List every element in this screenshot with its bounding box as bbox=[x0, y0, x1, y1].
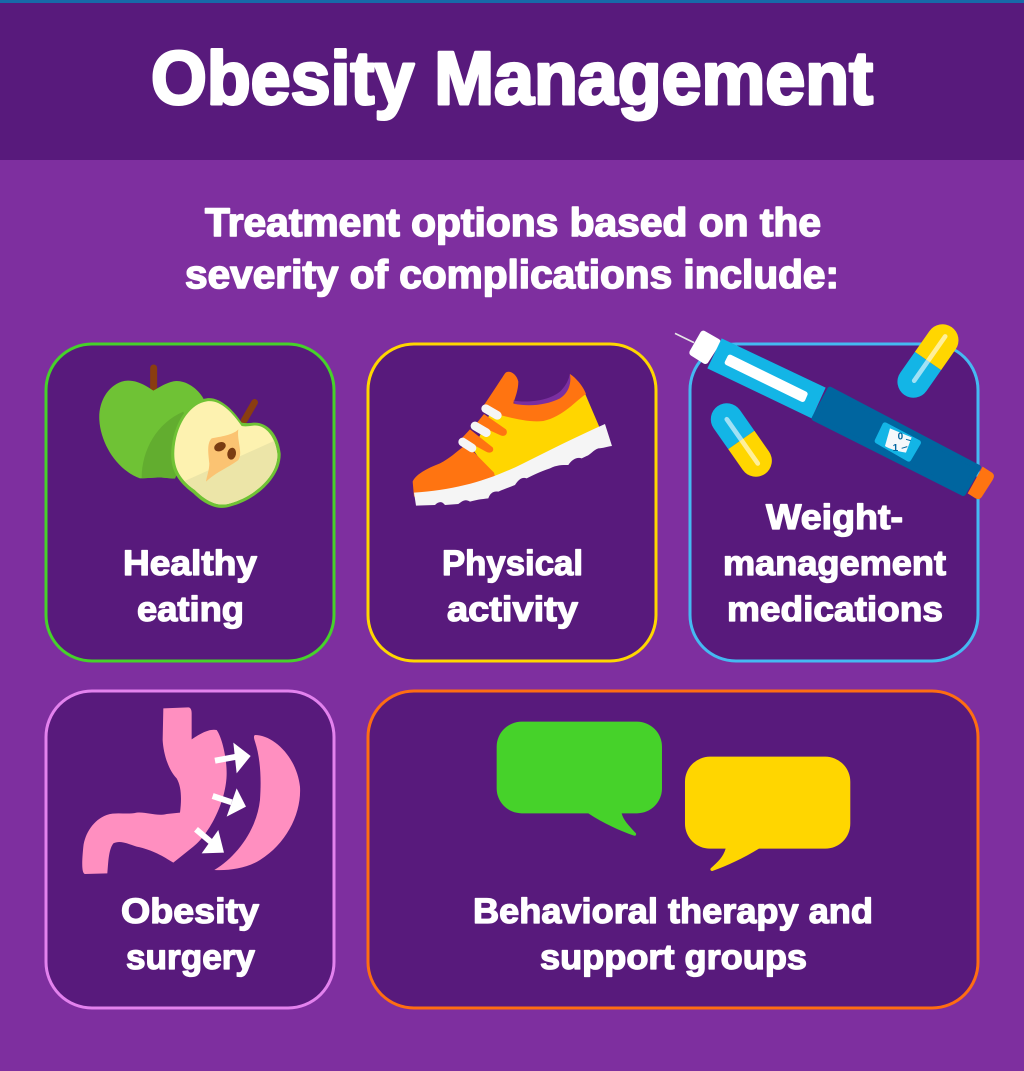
label: behavioral therapy and support groups: Behavioral therapy and bbox=[473, 892, 873, 931]
label: weight-management medications: medications bbox=[727, 590, 943, 629]
yellow bubble bbox=[685, 757, 850, 871]
label: weight-management medications: Weight- bbox=[766, 498, 903, 537]
label: healthy eating: Healthy bbox=[123, 544, 258, 583]
label: behavioral therapy and support groups bbox=[473, 892, 873, 977]
label: healthy eating: eating bbox=[137, 590, 244, 629]
subtitle: severity of complications include: bbox=[185, 253, 839, 297]
panel: weight-management medications bbox=[675, 318, 994, 661]
label: obesity surgery: surgery bbox=[126, 938, 256, 977]
header band bbox=[0, 3, 1024, 160]
icon: injection pen and capsules: 1 bbox=[893, 443, 899, 454]
label: physical activity: Physical bbox=[442, 544, 583, 583]
icon: speech bubbles bbox=[497, 722, 850, 871]
panel: behavioral therapy bbox=[368, 691, 978, 1008]
label: physical activity bbox=[442, 544, 583, 629]
icon: capsule right bbox=[891, 318, 965, 404]
panel: physical activity bbox=[368, 344, 656, 661]
icon: injection pen and capsules: 0 bbox=[898, 432, 904, 443]
label: obesity surgery bbox=[121, 892, 260, 977]
icon: apples bbox=[99, 368, 287, 513]
label: obesity surgery: Obesity bbox=[121, 892, 260, 931]
icon: capsule left bbox=[705, 397, 778, 483]
icon: injection pen and capsules bbox=[675, 318, 994, 499]
icon: running shoe bbox=[413, 372, 612, 506]
icon: stomach bbox=[82, 707, 300, 874]
icon: arrows bbox=[196, 743, 251, 853]
label: healthy eating bbox=[123, 544, 258, 629]
subtitle: Treatment options based on the bbox=[205, 201, 821, 245]
panel: obesity surgery bbox=[46, 691, 334, 1008]
title: Obesity Management bbox=[151, 36, 873, 120]
green bubble bbox=[497, 722, 662, 836]
label: weight-management medications: management bbox=[723, 544, 946, 583]
label: weight-management medications bbox=[723, 498, 946, 629]
subtitle bbox=[185, 201, 839, 297]
top strip bbox=[0, 0, 1024, 3]
panel: healthy eating bbox=[46, 344, 334, 661]
label: behavioral therapy and support groups: support groups bbox=[540, 938, 807, 977]
label: physical activity: activity bbox=[447, 590, 579, 629]
